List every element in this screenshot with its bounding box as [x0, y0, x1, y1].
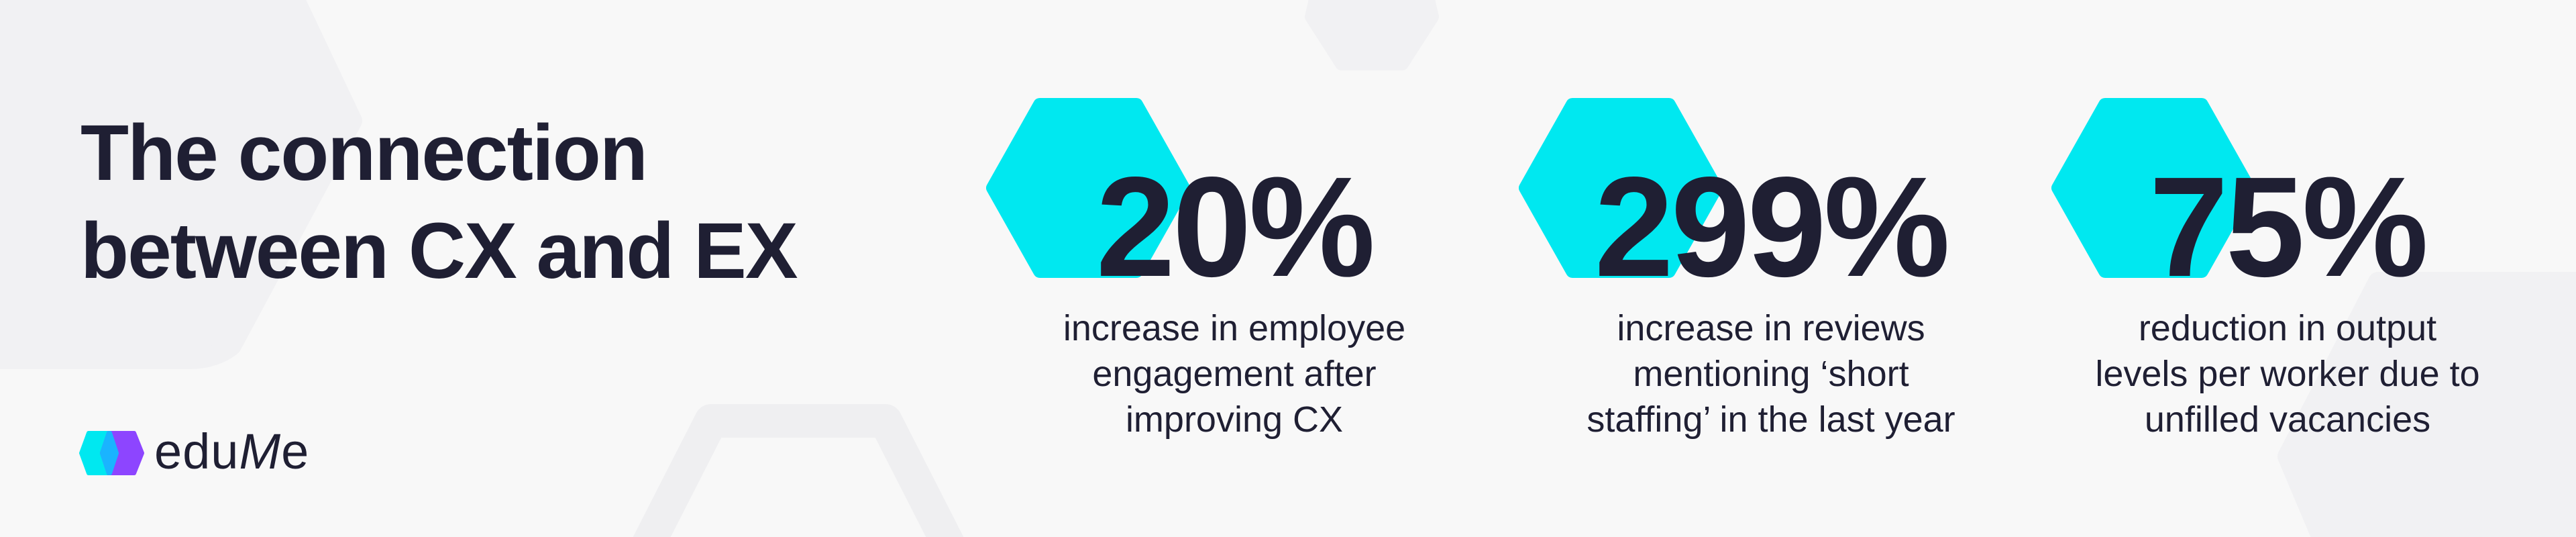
- description 3: unfilled vacancies: [2145, 399, 2430, 440]
- logo text: eduMe: [154, 424, 309, 479]
- description 2: increase in reviews: [1617, 308, 1925, 348]
- hexagon 3: [2051, 98, 2251, 278]
- stat 2: [1519, 98, 1955, 440]
- description 1: engagement after: [1092, 354, 1377, 394]
- title: [80, 109, 797, 295]
- description 2: staffing’ in the last year: [1587, 399, 1955, 440]
- hexagon 2: [1519, 98, 1719, 278]
- description 3: levels per worker due to: [2095, 354, 2480, 394]
- description 1: improving CX: [1126, 399, 1343, 440]
- number 20%: 20%: [1096, 147, 1373, 306]
- stat 1: [986, 98, 1405, 440]
- description 2: mentioning ‘short: [1633, 354, 1909, 394]
- description 1: [1063, 308, 1405, 440]
- number 299%: 299%: [1595, 147, 1947, 306]
- number 75%: 75%: [2149, 147, 2426, 306]
- logo: eduMe: [79, 424, 309, 479]
- description 3: reduction in output: [2139, 308, 2436, 348]
- stat 3: [2051, 98, 2480, 440]
- description 3: [2095, 308, 2480, 440]
- title: between CX and EX: [80, 207, 797, 295]
- icon: logo hexagons: [79, 431, 144, 475]
- hexagon 1: [986, 98, 1189, 278]
- title: The connection: [80, 109, 647, 197]
- description 2: [1587, 308, 1955, 440]
- description 1: increase in employee: [1063, 308, 1405, 348]
